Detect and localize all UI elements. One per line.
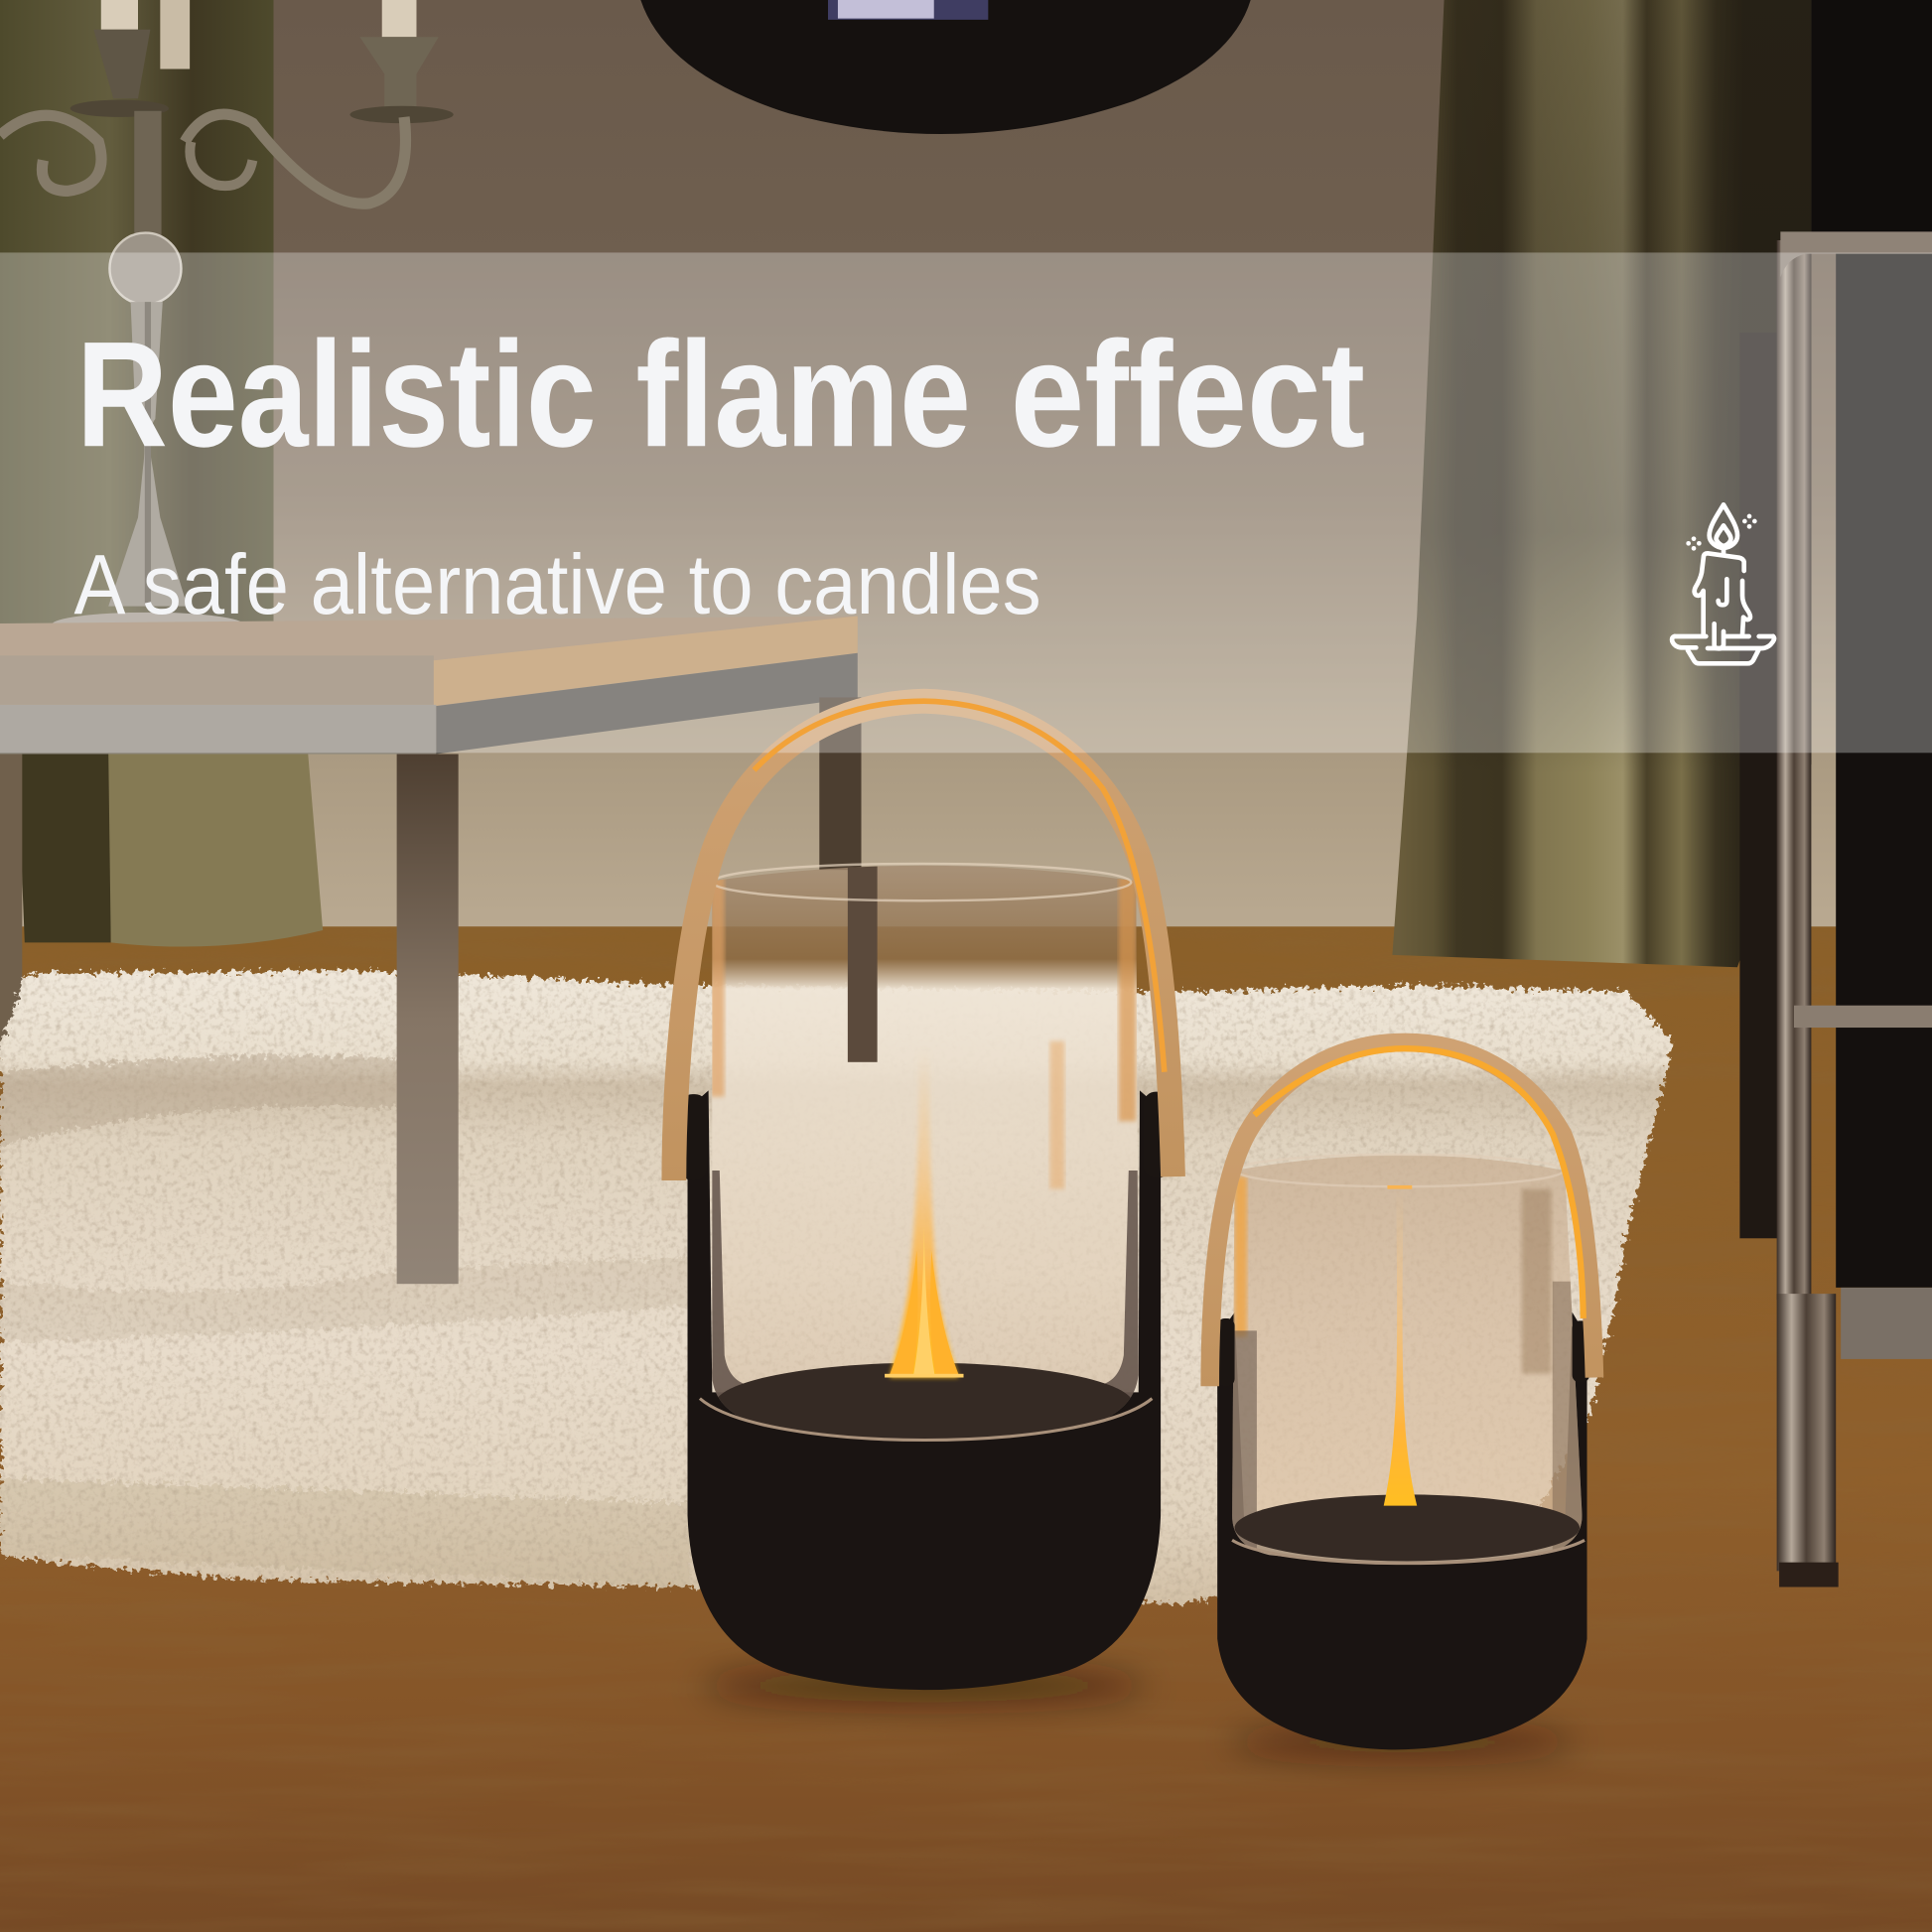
subtitle: A safe alternative to candles (73, 537, 1041, 632)
title (76, 311, 1365, 479)
icon: candle (1672, 504, 1774, 663)
candelabra (0, 0, 454, 637)
small lantern glass (1226, 1146, 1589, 1571)
leather chair with chrome frame (1739, 0, 1932, 1587)
large lantern pivots (680, 1092, 1171, 1180)
title: Realistic (76, 311, 597, 479)
translucent text band (0, 252, 1932, 753)
large lantern handle glow (755, 701, 1165, 1072)
black hanging fireplace bowl (640, 0, 1251, 134)
title: effect (1011, 311, 1365, 479)
shadows on floor under lanterns (702, 1668, 1575, 1756)
large lantern glass rim (712, 864, 1131, 900)
coffee table (0, 617, 862, 1049)
small lantern flame (1384, 1185, 1417, 1506)
small lantern handle glow (1254, 1048, 1584, 1318)
small lantern pivots (1217, 1318, 1589, 1386)
small lantern wooden handle (1210, 1042, 1594, 1386)
left curtain (0, 0, 323, 947)
large lantern wooden handle (674, 701, 1173, 1180)
large lantern black base (688, 1090, 1161, 1690)
small lantern (1210, 1042, 1594, 1749)
title: flame (635, 311, 971, 479)
table leg over rug (397, 755, 459, 1284)
right curtain (1392, 0, 1811, 967)
small lantern black base (1217, 1312, 1587, 1749)
large lantern flame (885, 1047, 964, 1378)
large lantern (674, 701, 1173, 1690)
small lantern glass rim (1236, 1155, 1564, 1186)
large lantern glass (702, 850, 1146, 1453)
white shag rug (0, 971, 1673, 1604)
